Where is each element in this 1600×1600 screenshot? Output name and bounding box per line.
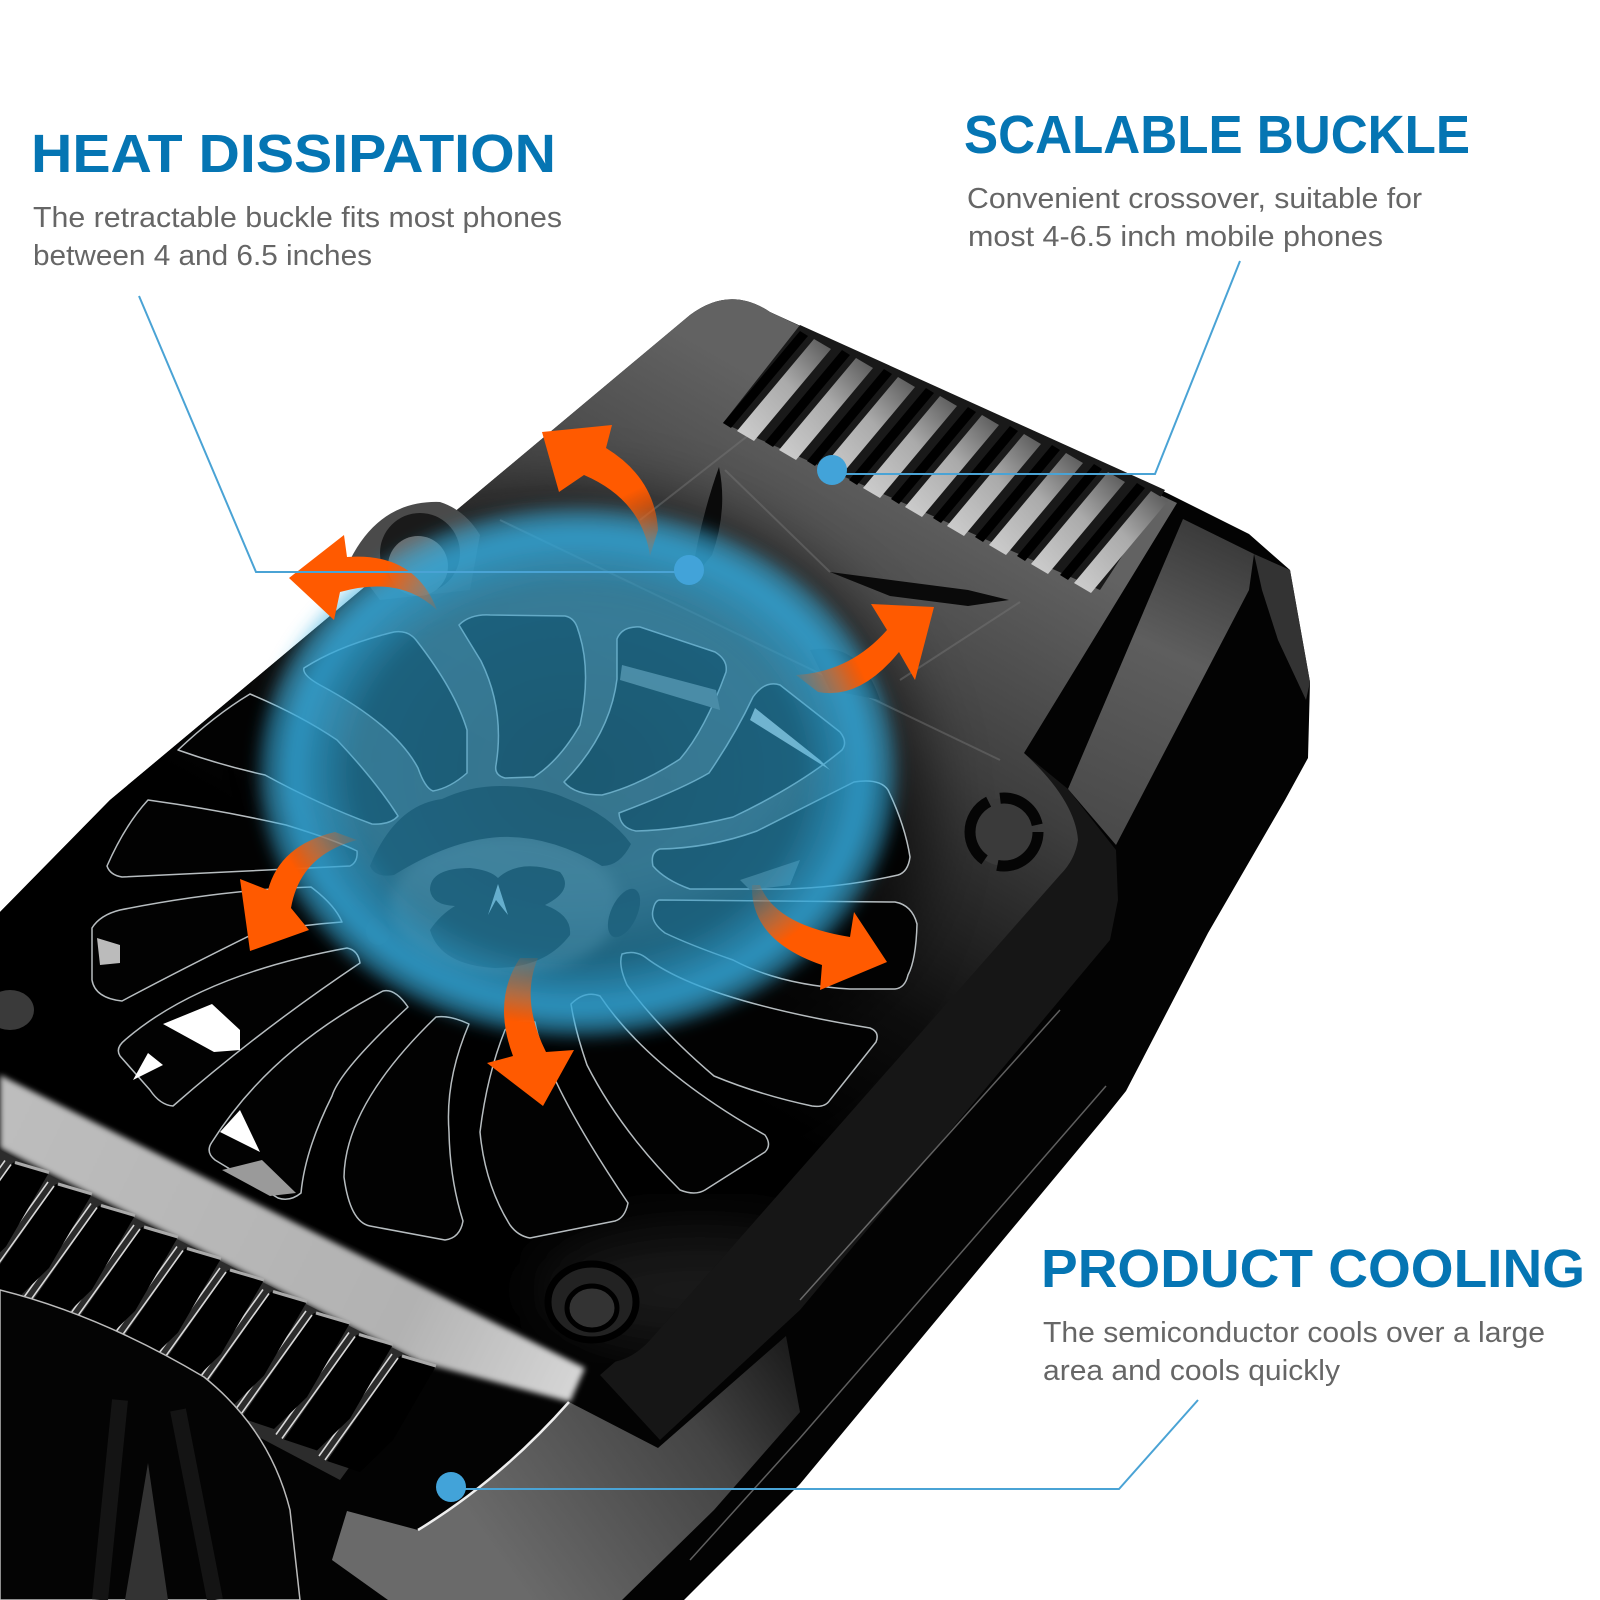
glow shadow — [210, 490, 930, 1350]
plate ridges and slits — [500, 395, 1020, 760]
top plate — [0, 299, 1177, 1363]
bright strip — [0, 1075, 585, 1402]
text: product cooling description: The semiconductor cools over a large — [1043, 1317, 1545, 1349]
text: product cooling description — [1043, 1317, 1545, 1387]
see-through highlights in vents — [97, 665, 830, 1196]
thumb pad — [0, 1290, 300, 1600]
heading: scalable buckle: SCALABLE BUCKLE — [964, 105, 1470, 165]
product: phone cooler — [0, 299, 1310, 1600]
callout line: scalable buckle — [817, 261, 1240, 485]
text: scalable buckle description — [967, 183, 1422, 253]
heading: product cooling: PRODUCT COOLING — [1041, 1239, 1585, 1299]
plate bevel — [600, 753, 1118, 1440]
arrow: top — [542, 425, 658, 556]
text: heat dissipation description: The retractable buckle fits most phones — [33, 202, 562, 234]
text: heat dissipation description: between 4 and 6.5 inches — [33, 240, 372, 272]
device body silhouette — [0, 299, 1310, 1600]
callout line: heat dissipation — [139, 296, 704, 585]
arrow: lower left — [240, 832, 357, 951]
top grille — [723, 325, 1168, 593]
fan vent blades — [92, 615, 917, 1240]
arrow: bottom — [487, 958, 574, 1106]
arrow: left — [289, 535, 437, 620]
text: scalable buckle description: Convenient crossover, suitable for — [967, 183, 1422, 215]
blue cooling glow — [253, 502, 903, 1042]
bottom grille — [0, 1150, 436, 1480]
front highlight edge — [418, 1402, 569, 1530]
arrow: lower right — [752, 885, 887, 990]
arrow: upper right — [796, 604, 934, 693]
fan hub — [366, 786, 647, 975]
orange airflow arrows — [240, 425, 934, 1106]
text: scalable buckle description: most 4-6.5 inch mobile phones — [968, 221, 1383, 253]
front grey band — [332, 1336, 800, 1600]
callout line: product cooling — [436, 1400, 1198, 1502]
side grey strip — [1068, 519, 1254, 845]
heading: heat dissipation: HEAT DISSIPATION — [31, 124, 556, 184]
outer edge line — [690, 1010, 1106, 1560]
text: product cooling description: area and cools quickly — [1043, 1355, 1341, 1387]
plate screws — [0, 502, 1038, 1340]
right side bevel — [1254, 554, 1310, 700]
text: heat dissipation description — [33, 202, 562, 272]
